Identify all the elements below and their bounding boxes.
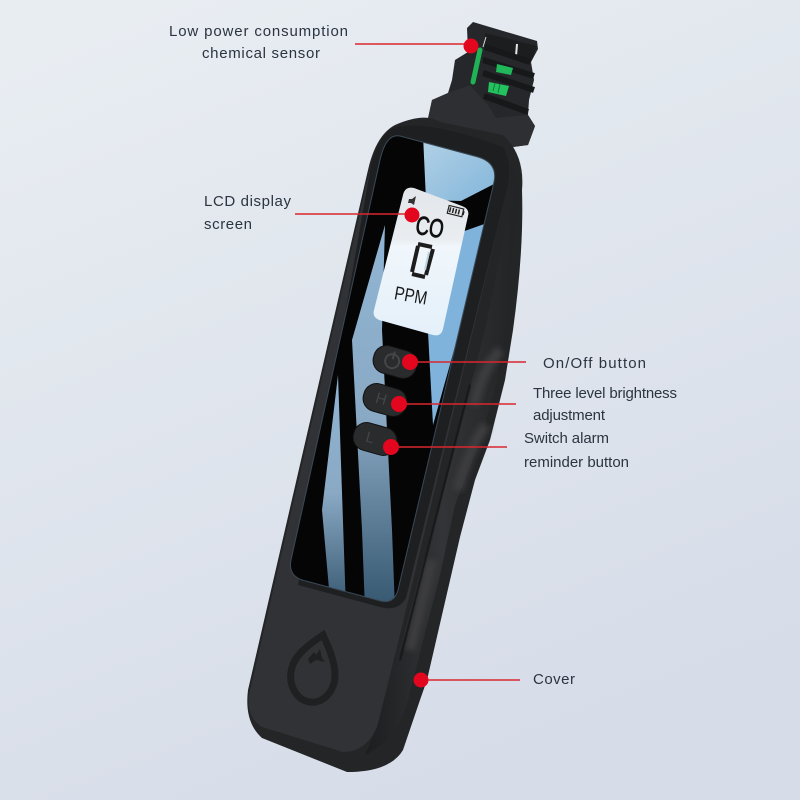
LCD battery icon <box>447 205 465 217</box>
brightness button: H <box>373 390 389 409</box>
callout: brightness adjustment: adjustment <box>533 407 606 424</box>
callout: LCD display <box>204 193 420 233</box>
callout: chemical sensor: Low power consumption <box>169 23 348 40</box>
LCD screen <box>374 188 468 335</box>
LCD seven-segment digit <box>412 244 433 277</box>
callout: alarm reminder button: reminder button <box>524 454 629 471</box>
LCD text PPM: PPM <box>393 283 429 310</box>
glass display panel <box>291 136 494 601</box>
callout: cover <box>414 671 575 688</box>
LCD text CO: CO <box>413 210 446 244</box>
callout: alarm reminder button <box>383 430 629 471</box>
on/off button <box>370 342 420 382</box>
device: carbon monoxide detector <box>247 22 538 772</box>
green sensor lights <box>473 50 513 96</box>
callout: chemical sensor <box>169 23 478 62</box>
body shell <box>247 118 522 772</box>
front face <box>249 125 509 752</box>
callout: on/off button: On/Off button <box>543 355 646 372</box>
icon: flame drop logo <box>291 635 335 702</box>
callout: brightness adjustment: Three level brightness <box>533 385 677 402</box>
callout: LCD display: screen <box>204 216 252 233</box>
LCD speaker icon <box>408 196 416 205</box>
side grip band <box>365 155 518 755</box>
alarm button <box>350 419 400 459</box>
callout: LCD display: LCD display <box>204 193 292 210</box>
brightness button <box>360 380 410 420</box>
callout: alarm reminder button: Switch alarm <box>524 430 609 447</box>
callout: cover: Cover <box>533 671 575 688</box>
callout: brightness adjustment <box>391 385 677 424</box>
callout: on/off button <box>402 354 646 372</box>
alarm button: L <box>364 429 376 447</box>
callout: chemical sensor: chemical sensor <box>202 45 320 62</box>
sensor head <box>427 22 538 150</box>
